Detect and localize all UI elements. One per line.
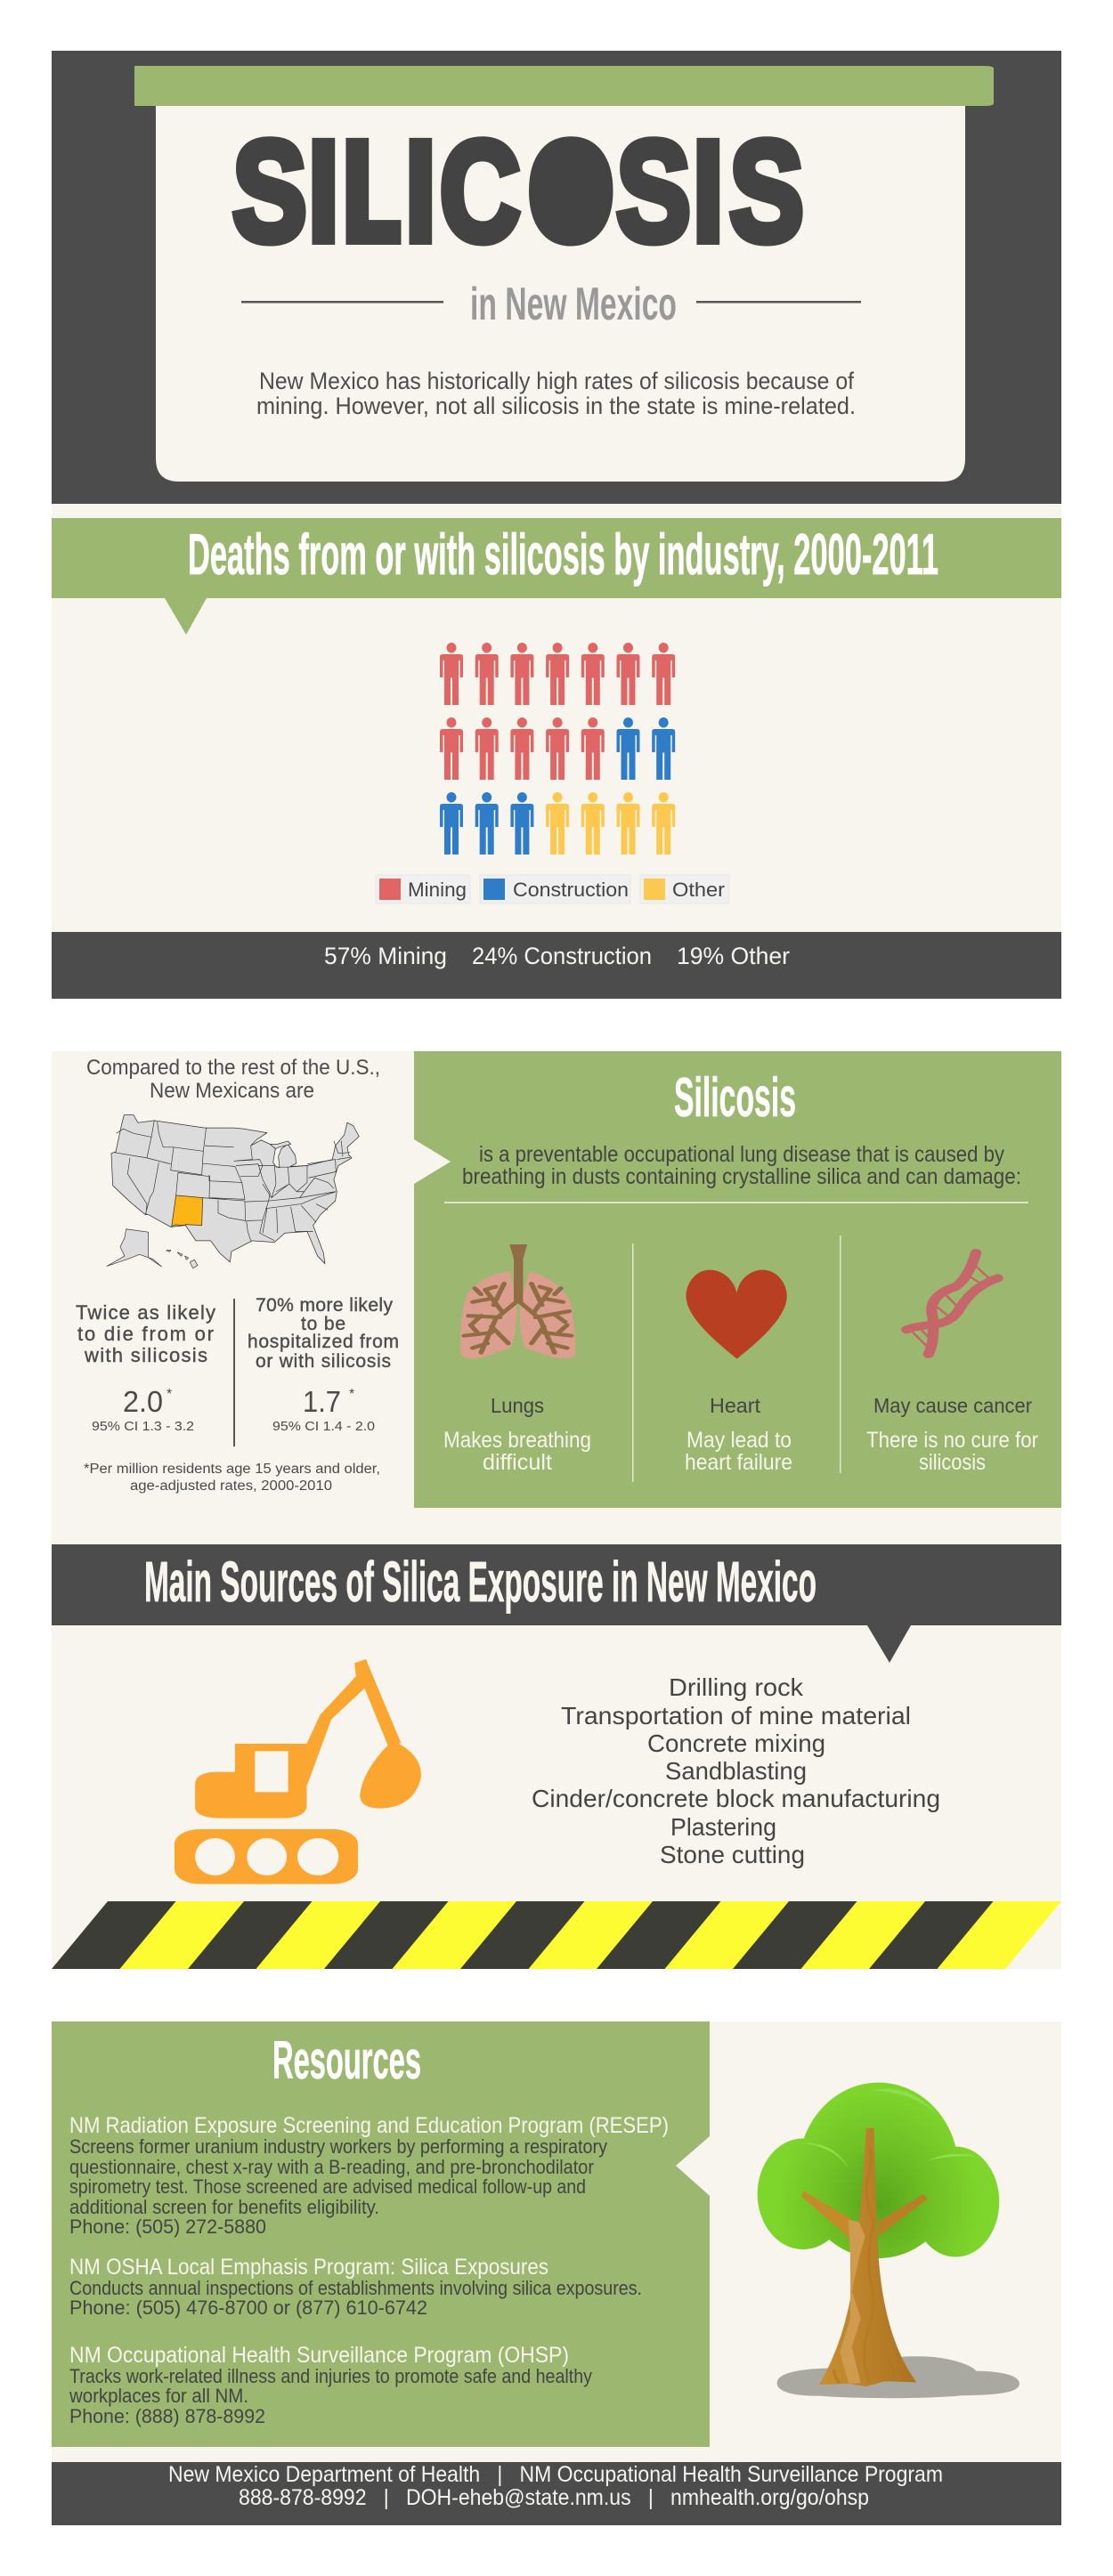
definition: [462, 1142, 1021, 1189]
resource: OHSP: NM Occupational Health Surveillance Program (OHSP): [69, 2343, 569, 2368]
list of exposure sources: Concrete mixing: [647, 1729, 825, 1757]
New Mexico: [172, 1195, 203, 1227]
stat: death likelihood: with silicosis: [84, 1344, 207, 1366]
footnote: [84, 1462, 380, 1494]
footnote: *Per million residents age 15 years and older,: [84, 1462, 380, 1477]
resource: RESEP: Phone: (505) 272-5880: [69, 2216, 266, 2238]
Alaska: [107, 1229, 162, 1267]
comparison heading: [86, 1056, 380, 1103]
resource: OHSP: workplaces for all NM.: [69, 2385, 248, 2407]
stat: hospitalization likelihood: *: [349, 1387, 354, 1402]
stat: death likelihood: 2.0: [123, 1385, 163, 1418]
resource: OHSP: [69, 2343, 592, 2427]
heading: Resources: [272, 2030, 421, 2090]
panel: silicosis definition: [414, 1051, 1061, 1508]
stat: hospitalization likelihood: 1.7: [303, 1385, 341, 1418]
stat: hospitalization likelihood: hospitalized from: [248, 1332, 399, 1352]
label: lungs: [443, 1394, 591, 1475]
stat: death likelihood: to die from or: [77, 1323, 214, 1345]
stat: hospitalization likelihood: [248, 1295, 399, 1434]
intro text: [256, 368, 856, 419]
resource: OSHA: Conducts annual inspections of establishments involving silica exposures.: [69, 2277, 642, 2299]
icon: DNA: [906, 1253, 998, 1354]
icon: heart: [686, 1270, 787, 1358]
heading: Silicosis: [674, 1067, 796, 1129]
hazard stripes: [52, 1901, 1061, 1969]
icon: tree: [758, 2083, 1020, 2398]
footer: 888-878-8992 | DOH-eheb@state.nm.us | nmhealth.org/go/ohsp: [239, 2485, 869, 2510]
stat: death likelihood: *: [167, 1387, 172, 1402]
resource: RESEP: Screens former uranium industry workers by performing a respiratory: [69, 2135, 607, 2158]
stat: death likelihood: Twice as likely: [76, 1301, 215, 1324]
green title tab: [134, 66, 994, 106]
definition: breathing in dusts containing crystalline silica and can damage:: [462, 1164, 1021, 1189]
stat: death likelihood: [76, 1301, 215, 1434]
percentages bar: 24% Construction: [472, 943, 652, 969]
title card: [156, 106, 965, 482]
list of exposure sources: Plastering: [670, 1813, 776, 1841]
stat: death likelihood: 95% CI 1.3 - 3.2: [92, 1419, 194, 1434]
comparison heading: New Mexicans are: [150, 1079, 314, 1103]
label: heart: [685, 1394, 792, 1475]
percentages bar: 57% Mining: [324, 943, 447, 969]
percentages bar: 19% Other: [677, 943, 790, 969]
resource: RESEP: additional screen for benefits eligibility.: [69, 2196, 379, 2218]
panel: main sources of silica exposure: [52, 1544, 1061, 1969]
list of exposure sources: Drilling rock: [669, 1673, 804, 1701]
label: lungs: difficult: [483, 1450, 552, 1475]
stat: hospitalization likelihood: 70% more likely: [256, 1295, 394, 1316]
panel: deaths by industry: [52, 504, 1061, 999]
footer: [52, 2462, 1061, 2525]
definition: is a preventable occupational lung disease that is caused by: [479, 1142, 1004, 1167]
list of exposure sources: Sandblasting: [665, 1757, 807, 1785]
resource: OSHA: Phone: (505) 476-8700 or (877) 610-6742: [69, 2297, 427, 2319]
footer: New Mexico Department of Health | NM Occupational Health Surveillance Program: [168, 2462, 943, 2487]
label: heart: May lead to: [686, 1428, 792, 1453]
label: lungs: Lungs: [491, 1394, 544, 1417]
people pictogram: [440, 643, 675, 855]
resource: OSHA: NM OSHA Local Emphasis Program: Silica Exposures: [69, 2255, 548, 2280]
label: heart: heart failure: [685, 1450, 792, 1475]
resource: OHSP: Phone: (888) 878-8992: [69, 2405, 265, 2427]
stat: hospitalization likelihood: or with silicosis: [256, 1351, 391, 1372]
percentages bar: [52, 932, 1061, 999]
comparison heading: Compared to the rest of the U.S.,: [86, 1056, 380, 1080]
resource: RESEP: NM Radiation Exposure Screening and Education Program (RESEP): [69, 2113, 669, 2138]
stat: hospitalization likelihood: to be: [301, 1314, 345, 1334]
legend: Mining: [408, 879, 467, 901]
resource: OHSP: Tracks work-related illness and injuries to promote safe and healthy: [69, 2365, 592, 2387]
resource: RESEP: questionnaire, chest x-ray with a B-reading, and pre-bronchodilator: [69, 2156, 594, 2178]
panel: comparison and silicosis: [52, 1051, 1061, 1969]
legend: [376, 875, 729, 903]
legend: Other: [672, 879, 725, 901]
list of exposure sources: Stone cutting: [660, 1841, 805, 1868]
subtitle: in New Mexico: [470, 279, 677, 330]
stat: hospitalization likelihood: 95% CI 1.4 - 2.0: [272, 1419, 375, 1434]
heading bar: [52, 518, 1061, 635]
label: cancer: May cause cancer: [873, 1394, 1032, 1417]
label: cancer: [866, 1394, 1038, 1475]
intro text: mining. However, not all silicosis in the state is mine-related.: [256, 393, 856, 419]
label: heart: Heart: [710, 1394, 761, 1417]
label: lungs: Makes breathing: [443, 1428, 591, 1453]
Hawaii: [167, 1250, 198, 1268]
label: cancer: There is no cure for: [866, 1428, 1038, 1453]
icon: excavator: [175, 1659, 421, 1884]
list of exposure sources: Cinder/concrete block manufacturing: [532, 1785, 940, 1812]
resource: OSHA: [69, 2255, 642, 2319]
list of exposure sources: [532, 1673, 940, 1868]
title: SILICOSIS: [232, 112, 804, 271]
panel: resources: [52, 2021, 1061, 2525]
label: cancer: silicosis: [919, 1450, 986, 1475]
heading bar: [52, 1544, 1061, 1663]
resource: RESEP: [69, 2113, 669, 2238]
legend: Construction: [513, 879, 629, 901]
footnote: age-adjusted rates, 2000-2010: [130, 1478, 332, 1494]
icon: lungs: [460, 1244, 575, 1358]
resource: RESEP: spirometry test. Those screened are advised medical follow-up and: [69, 2175, 586, 2198]
panel: title header: [52, 51, 1061, 504]
list of exposure sources: Transportation of mine material: [561, 1702, 911, 1729]
intro text: New Mexico has historically high rates of silicosis because of: [259, 368, 854, 394]
US map: [107, 1115, 359, 1268]
